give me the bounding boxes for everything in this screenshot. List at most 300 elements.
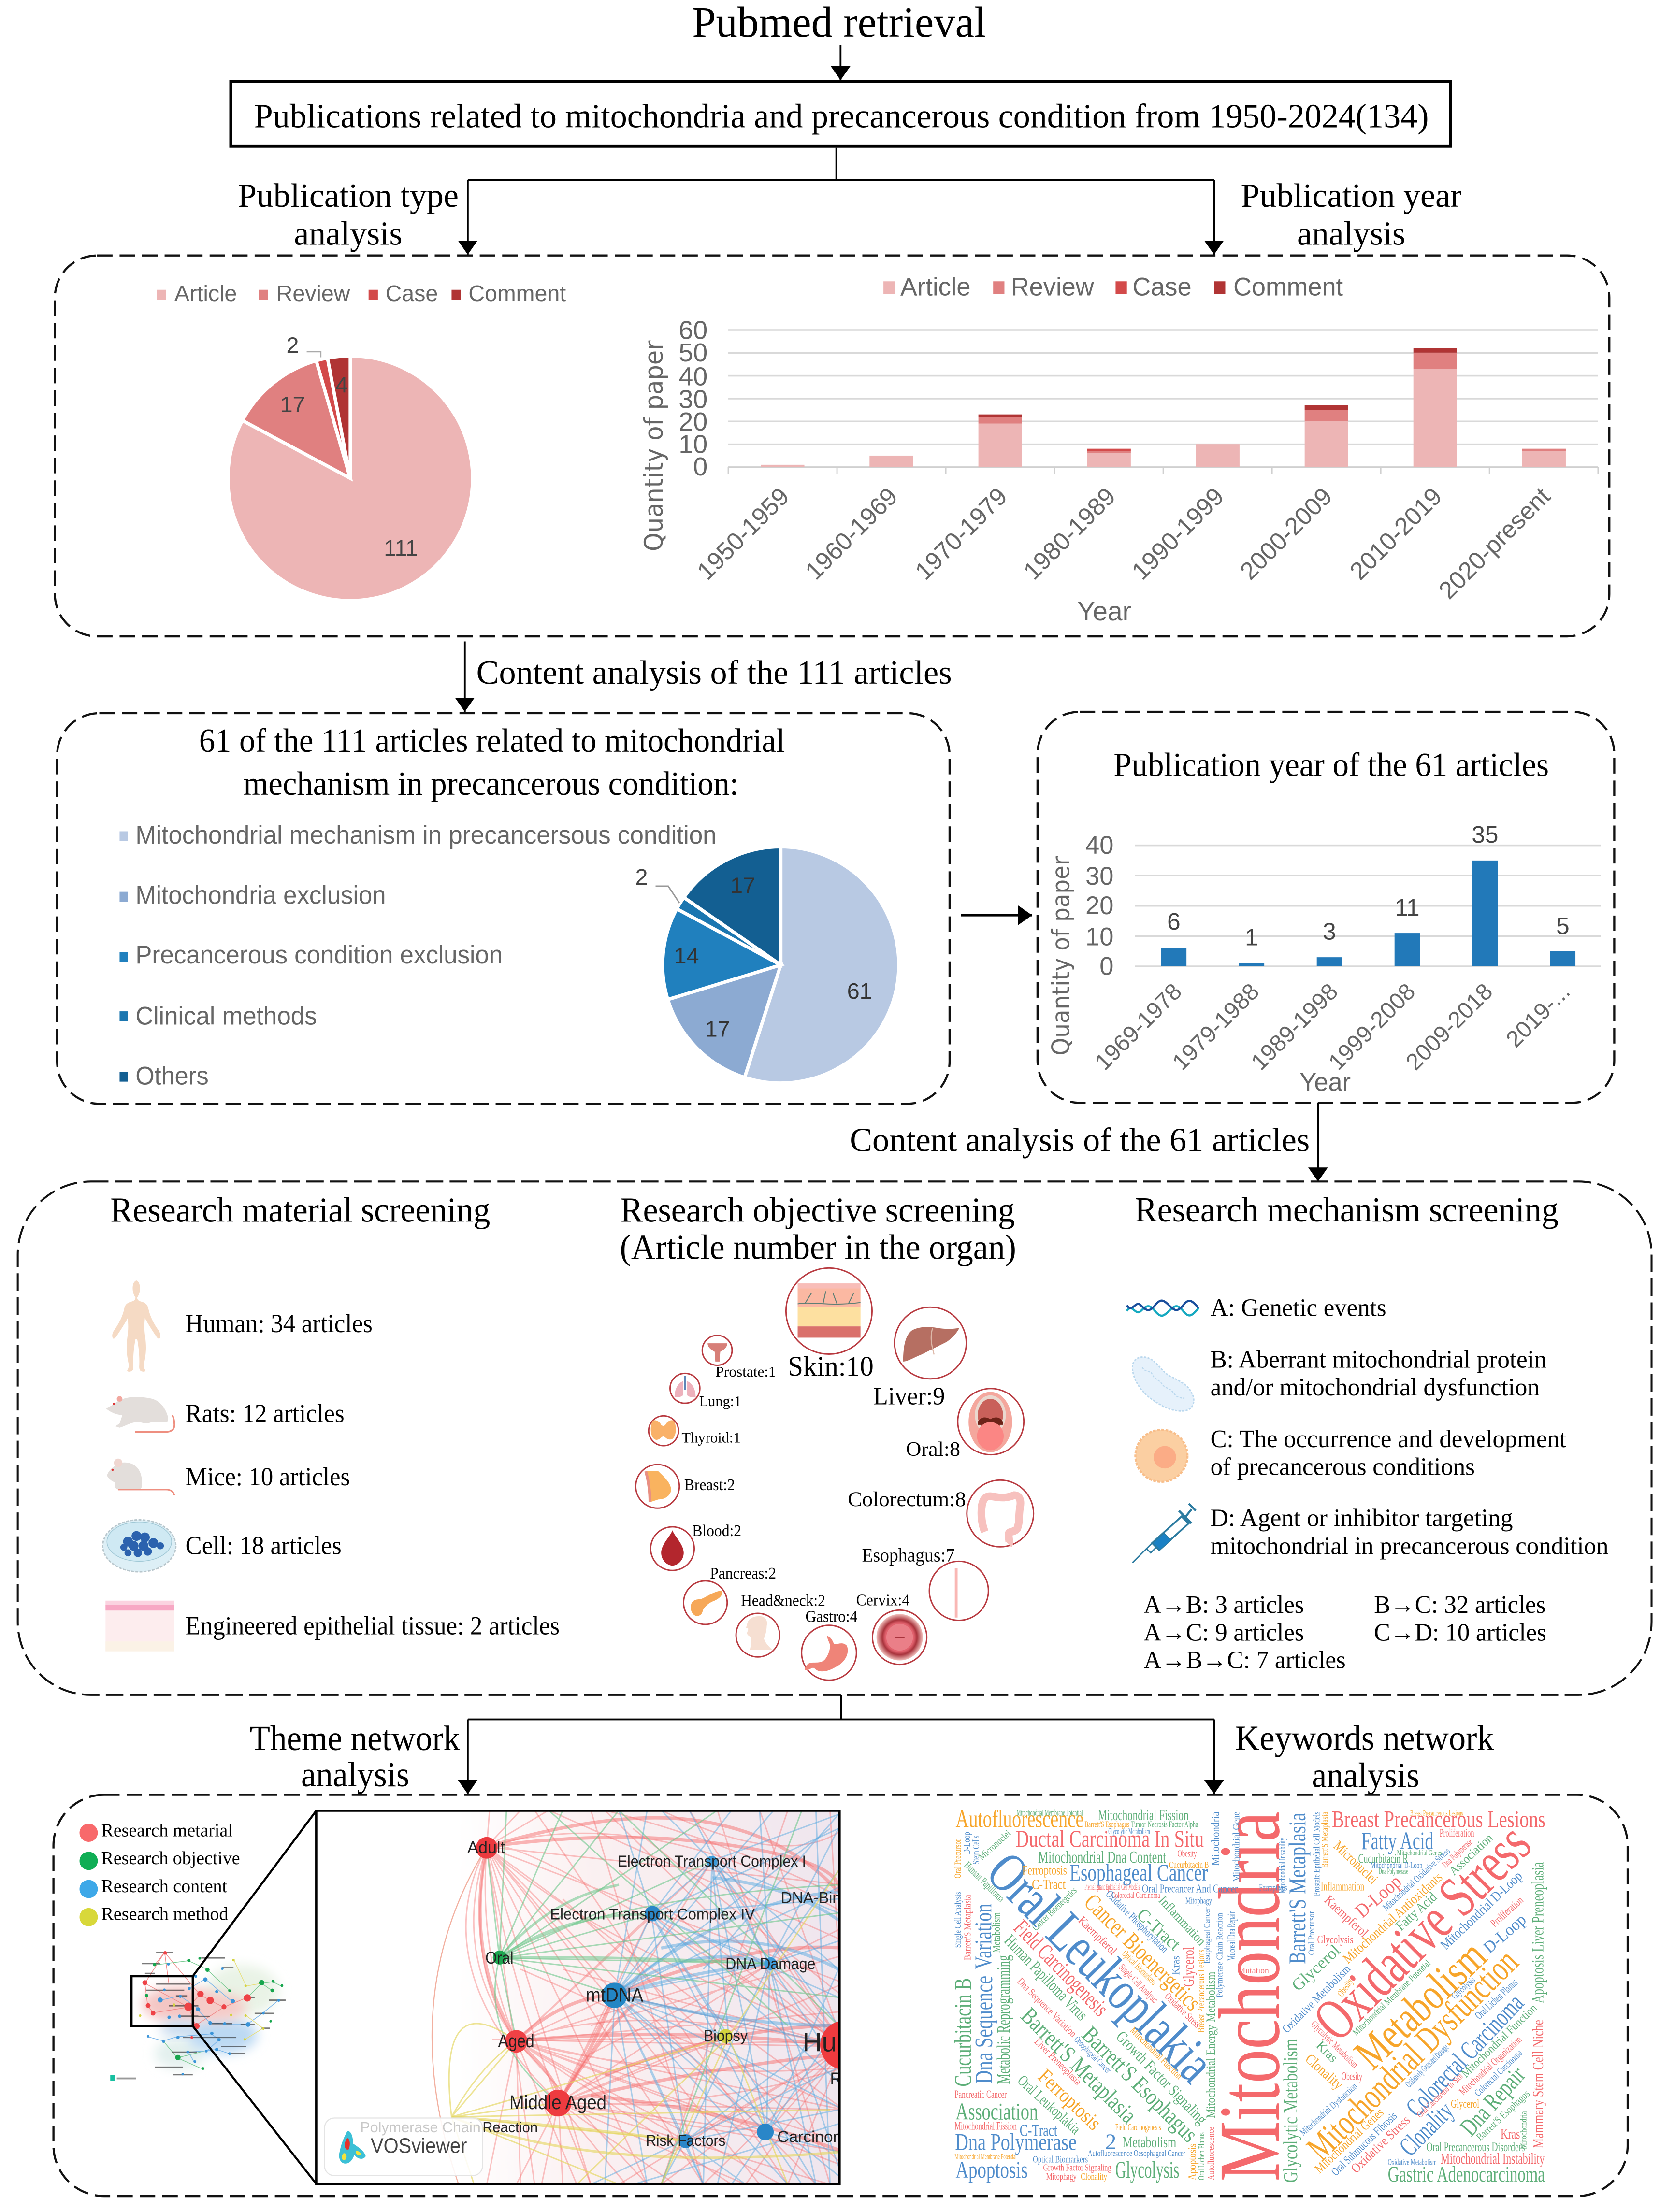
yellow links	[449, 1871, 838, 2184]
pie labels: publication type	[280, 333, 418, 560]
other keywords: Barrett'S Esophagus	[1077, 2021, 1203, 2147]
network labels: Adult	[467, 1838, 505, 1857]
other keywords: Polymerase Chain Reaction	[1215, 1913, 1225, 1997]
green links	[487, 1810, 838, 2184]
bar chart: 61 articles by year: 40	[1085, 832, 1113, 860]
legend: article content: Others	[135, 1062, 209, 1090]
legend: article content: Mitochondria exclusion	[135, 881, 386, 909]
text: agent or inhibitor: mitochondrial in precancerous condition	[1211, 1532, 1608, 1560]
label: lung: Lung:1	[699, 1393, 741, 1409]
other keywords: Fatty Acid	[1361, 1827, 1433, 1855]
other keywords: Mitochondrial Dysfunction	[1298, 2081, 1359, 2138]
other keywords: Mammary Stem Cell Niche	[1529, 2020, 1546, 2149]
legend: network clusters: Research method	[101, 1904, 229, 1925]
other keywords: Micronuclei	[977, 1828, 1013, 1862]
arrow: content analysis of 61 articles	[1317, 1103, 1318, 1181]
other keywords: Mitophagy	[1046, 2171, 1077, 2182]
other keywords: Kaempferol	[1322, 1892, 1371, 1940]
text: agent or inhibitor	[1211, 1504, 1608, 1560]
legend: publication type: Comment	[468, 281, 566, 306]
other keywords: Growth Factor Signaling	[1043, 2162, 1111, 2173]
icon: skin	[786, 1268, 872, 1354]
other keywords: Cucurbitacin B	[950, 1978, 976, 2087]
other keywords: Glycolysis	[1115, 2156, 1179, 2183]
icon: breast	[635, 1465, 679, 1508]
other keywords: Oral Leukoplakia	[1014, 2071, 1084, 2138]
other keywords: Dna Polymerase	[1379, 1866, 1408, 1876]
icon: cervix	[872, 1610, 927, 1665]
heading: keywords network analysis: Keywords network	[1235, 1718, 1494, 1757]
label: skin: Skin:10	[788, 1350, 874, 1382]
panel heading	[199, 722, 785, 803]
other keywords: Proliferation	[1488, 1894, 1526, 1930]
label: pancreas: Pancreas:2	[710, 1565, 776, 1582]
icon: pancreas	[683, 1581, 727, 1624]
panel: publication year of the 61 articles	[1038, 712, 1614, 1103]
heading: research mechanism screening: Research mechanism screening	[1135, 1190, 1559, 1229]
other keywords: Oral Lichen Planus	[1197, 2132, 1206, 2180]
pie chart: publication type	[228, 356, 473, 601]
word: Metabolism: Metabolism	[1345, 1931, 1496, 2079]
other keywords: 2	[1105, 2130, 1116, 2155]
heading: publication type analysis: Publication type	[238, 177, 459, 215]
label: breast: Breast:2	[684, 1476, 735, 1494]
pie labels: article content: 14	[674, 943, 699, 968]
bar chart: 61 articles by year: 3	[1323, 919, 1336, 945]
x axis labels: 2020-present	[1433, 482, 1556, 604]
bar chart: 61 articles by year: 30	[1085, 862, 1113, 891]
other keywords: Field Carcinogenesis	[1009, 1915, 1113, 2021]
x axis labels: 2010-2019	[1344, 482, 1447, 585]
icon: syringe	[1132, 1504, 1196, 1563]
x axis labels	[692, 482, 1556, 604]
other keywords: Premalignant Epithelial Cell Models	[1084, 1882, 1140, 1892]
label: thyroid: Thyroid:1	[681, 1430, 741, 1446]
pie labels: article content: 61	[847, 978, 872, 1004]
other keywords: Optical Biomarkers	[1033, 2154, 1088, 2165]
heading: keywords network analysis: analysis	[1312, 1756, 1419, 1795]
other keywords: Glycerol	[1288, 1941, 1344, 1995]
other keywords: Oral Precursor	[1307, 1911, 1317, 1955]
other keywords: Cancer Bioenergetics	[1030, 1885, 1079, 1933]
other keywords: C-Tract	[1032, 1877, 1066, 1892]
arrow: to publication year of 61 articles	[961, 915, 1032, 916]
text: occurrence and development: C: The occurrence and development	[1211, 1425, 1567, 1453]
network nodes	[476, 1837, 869, 2148]
other keywords: Proliferation	[1440, 1827, 1474, 1839]
icon: liver	[895, 1307, 967, 1379]
icon: lung	[670, 1373, 700, 1403]
other keywords: Mitochondrial Membrane Potential	[1017, 1808, 1083, 1818]
other keywords: Inflammation	[1156, 1893, 1209, 1948]
other keywords: Metabolism	[991, 1912, 1003, 1953]
other keywords: Mitochondrial Oxidative Stress	[1381, 1846, 1452, 1913]
other keywords: Breast Precancerous Lesions	[1332, 1806, 1545, 1832]
other keywords: Obesity	[1342, 2070, 1362, 2083]
other keywords: Oral Precancer And Cancer	[1142, 1882, 1238, 1896]
other keywords: Mitochondrial Antioxidants	[1340, 1869, 1445, 1967]
heading: publication year analysis: Publication year	[1241, 177, 1462, 215]
other keywords: Field Carcinogenesis	[1115, 2122, 1161, 2133]
icon: engineered tissue	[105, 1601, 174, 1652]
legend: article content: Mitochondrial mechanism in precancersous condition	[135, 821, 717, 849]
other keywords: Glycolytic Metabolism	[1309, 2019, 1360, 2070]
text: engineered epithelial tissue articles: Engineered epithelial tissue: 2 articles	[186, 1611, 560, 1640]
heading: theme network analysis: analysis	[301, 1755, 409, 1794]
heading: research objective screening: (Article number in the organ)	[620, 1227, 1016, 1266]
other keywords: Barrett'S Metaplasia	[1016, 2002, 1142, 2128]
other keywords: Mitochondria	[1518, 2111, 1528, 2149]
other keywords: Human Papilloma	[962, 1859, 1007, 1904]
other keywords: Mitochondrial Function	[1459, 2001, 1540, 2080]
heading: content analysis of 61 articles: Content analysis of the 61 articles	[850, 1121, 1310, 1159]
other keywords: Metabolic Reprogramming	[994, 1955, 1014, 2084]
text: cell articles: Cell: 18 articles	[186, 1531, 342, 1560]
other keywords: Human Papilloma Virus	[1001, 1931, 1091, 2024]
chart: keyword word cloud	[950, 1805, 1547, 2187]
label: colorectum: Colorectum:8	[848, 1488, 966, 1511]
other keywords: Apoptosis Liver Preneoplasia	[1528, 1862, 1547, 2003]
other keywords: Mitochondrial Genes	[1312, 2105, 1386, 2176]
heading: research material screening: Research material screening	[110, 1190, 490, 1229]
other keywords: Oral Precursor	[953, 1839, 963, 1878]
label: blood: Blood:2	[692, 1522, 741, 1540]
text: mitochondrial dysfunction: and/or mitochondrial dysfunction	[1211, 1373, 1540, 1401]
legend: network clusters	[79, 1820, 240, 1926]
other keywords: Breast Precancerous Lesions	[1410, 1810, 1463, 1818]
logo: VOSviewer	[325, 2118, 482, 2176]
other keywords: Inflammation	[1321, 1879, 1364, 1893]
legend: article content	[119, 821, 717, 1090]
heading: research objective screening	[620, 1190, 1016, 1266]
other keywords	[950, 1805, 1547, 2187]
legend: publication type: Case	[386, 281, 438, 306]
text: pathway article counts: A→B: 3 articles	[1144, 1591, 1304, 1619]
legend: network clusters: Research content	[101, 1876, 228, 1896]
x axis labels: 2000-2009	[1235, 482, 1337, 585]
pie labels: article content: 2	[635, 864, 648, 890]
other keywords: Glycolytic Metabolism	[1108, 1826, 1150, 1836]
bar chart: 61 articles by year: 2009-2018	[1401, 979, 1498, 1075]
network labels: Reaction	[482, 2119, 538, 2136]
other keywords: C-Tract	[1133, 1904, 1185, 1955]
box: publications: Publications related to mitochondria and precancerous condition from 1950-2024(134)	[254, 98, 1429, 135]
icon: cell dish	[103, 1520, 176, 1572]
panel: network analyses	[54, 1795, 1628, 2196]
y axis labels: 0	[693, 452, 707, 481]
heading: theme network analysis: Theme network	[250, 1719, 460, 1758]
other keywords: D-Loop	[1351, 1870, 1405, 1922]
other keywords: Kras	[1501, 2126, 1520, 2142]
word: Oxidative Stress: Oxidative Stress	[1301, 1811, 1543, 2053]
legend: network clusters: Research objective	[101, 1848, 240, 1868]
x axis labels: 1960-1969	[800, 482, 903, 585]
other keywords: Oxidative Metabolism	[1280, 1962, 1353, 2036]
arrow: retrieval to publications	[840, 45, 841, 80]
other keywords: Oral Lichen Planus	[1472, 1976, 1520, 2022]
legend: article content: Precancerous condition exclusion	[135, 941, 503, 969]
other keywords: Obesity	[1178, 1849, 1197, 1859]
icon: mitochondrion	[1132, 1357, 1194, 1411]
logo: VOSviewer: VOSviewer	[371, 2134, 467, 2158]
icon: gastro	[802, 1625, 856, 1680]
panel heading: Publication year of the 61 articles	[1113, 747, 1549, 784]
icon: thyroid	[649, 1416, 678, 1446]
text: human articles: Human: 34 articles	[186, 1309, 373, 1338]
bar chart: 61 articles by year: 5	[1556, 913, 1570, 939]
panel: 61 of 111 articles	[57, 713, 950, 1104]
other keywords: Ferroptosis	[1259, 1882, 1287, 1892]
label: prostate: Prostate:1	[716, 1364, 776, 1380]
bar chart: publication year: Quantity of paper	[639, 340, 669, 551]
other keywords: Glycerol	[1451, 2097, 1479, 2111]
bar chart: 61 articles by year: 1969-1978	[1090, 979, 1187, 1075]
vertical keywords: Barrett'S Metaplasia	[1284, 1812, 1311, 1964]
chart: full network thumbnail	[110, 1951, 286, 2081]
other keywords: Ductal Carcinoma In Situ	[1016, 1825, 1204, 1852]
text: rats articles: Rats: 12 articles	[186, 1399, 345, 1428]
other keywords: Gastric Adenocarcinoma	[1388, 2162, 1545, 2187]
other keywords: Oxidative Stress	[1348, 2112, 1413, 2176]
heading: theme network analysis	[250, 1719, 460, 1794]
other keywords: Cancer Bioenergetics	[1079, 1888, 1206, 2016]
other keywords: Mitochondrial Gene	[1231, 1811, 1242, 1882]
other keywords: Mitochondrial Genes	[1397, 1849, 1442, 1857]
other keywords: Kras	[1169, 1956, 1182, 1975]
label: esophagus: Esophagus:7	[862, 1545, 955, 1566]
text: agent or inhibitor: D: Agent or inhibitor targeting	[1211, 1504, 1513, 1532]
legend: publication year: Review	[1011, 273, 1094, 301]
icon: DNA	[1127, 1301, 1198, 1316]
other keywords: Mitochondrial D-Loop	[1371, 1860, 1422, 1870]
x axis labels: 1990-1999	[1126, 482, 1229, 585]
network labels: Electron Transport Complex I	[618, 1853, 806, 1870]
arrow: branch to network analyses	[468, 1695, 1214, 1794]
text: mitochondrial dysfunction	[1211, 1345, 1546, 1401]
other keywords: Liver Preneoplasia	[1032, 2036, 1084, 2087]
word: Mitochondrial Dysfunction: Mitochondrial Dysfunction	[1299, 1941, 1526, 2168]
other keywords: Pancreatic Cancer	[954, 2088, 1007, 2101]
network labels: Oral	[485, 1949, 514, 1968]
other keywords: Kras	[1314, 2038, 1341, 2065]
network labels: DNA-Binding	[781, 1889, 870, 1907]
legend: publication year: Case	[1132, 273, 1192, 301]
other keywords: Optical Biomarkers	[1120, 1948, 1159, 1987]
bar chart: 61 articles by year: 1	[1245, 924, 1258, 950]
arrow: branch to publication analyses	[468, 148, 1214, 255]
other keywords: Barrett'S Metaplasia	[1320, 1811, 1330, 1868]
other keywords: Prostate Epithelial Cell Models	[1312, 1811, 1322, 1896]
network labels	[467, 1841, 838, 2146]
other keywords: Colorectal Carcinoma	[1472, 2048, 1525, 2098]
bar chart: 61 articles by year: 1999-2008	[1324, 979, 1420, 1075]
text: occurrence and development	[1211, 1425, 1567, 1480]
text: pathway article counts: B→C: 32 articles	[1374, 1591, 1545, 1619]
heading: content analysis of 111 articles: Content analysis of the 111 articles	[476, 654, 952, 691]
legend: publication year: Comment	[1233, 273, 1343, 301]
other keywords: Glycolytic Metabolism	[1280, 2039, 1301, 2183]
other keywords: Clonality	[1302, 2051, 1347, 2093]
legend: network clusters: Research metarial	[101, 1820, 233, 1840]
diagonal keywords: Colorectal Carcinoma	[1400, 1988, 1529, 2122]
y axis labels: 40	[678, 362, 707, 391]
legend: publication type: Review	[276, 281, 350, 306]
bar chart: 61 articles by year: 10	[1085, 923, 1113, 951]
other keywords: Oral Precancerous Disorders	[1427, 2140, 1525, 2154]
other keywords: Barrett'S Metaplasia	[963, 1895, 973, 1960]
box: publications	[231, 82, 1450, 146]
bar chart: 61 articles by year: 0	[1099, 952, 1113, 980]
y axis labels: 20	[678, 407, 707, 436]
other keywords: Apoptosis	[1186, 2143, 1198, 2180]
pie labels: publication type: 2	[287, 333, 299, 358]
other keywords: Fatty Acid	[1393, 1889, 1440, 1934]
chart: zoomed theme network	[316, 1810, 889, 2184]
network labels: Human	[803, 2027, 889, 2057]
other keywords: Mitochondrial Membrane Potential	[954, 2153, 1017, 2161]
other keywords: Ferroptosis	[1034, 2065, 1106, 2135]
text: pathway article counts: A→C: 9 articles	[1144, 1618, 1304, 1646]
label: liver: Liver:9	[873, 1382, 945, 1410]
other keywords: Autofluorescence	[1206, 2127, 1216, 2180]
other keywords: Cucurbitacin R	[1358, 1852, 1408, 1866]
heading: publication type analysis	[238, 177, 459, 253]
legend: article content: Clinical methods	[135, 1003, 317, 1031]
red links	[466, 1810, 844, 2184]
other keywords: Variation	[970, 1904, 996, 1969]
other keywords: Oxidative Phosphorylation	[1103, 1888, 1171, 1955]
other keywords: D-Loop	[962, 1832, 972, 1854]
blue links	[591, 1810, 844, 2184]
icon: prostate	[702, 1336, 732, 1365]
other keywords: Oral Submucous Fibrosis	[1329, 2110, 1400, 2179]
panel heading: mechanism in precancerous condition:	[244, 765, 738, 803]
icon: blood	[650, 1527, 694, 1570]
other keywords: Association	[955, 2098, 1038, 2125]
other keywords: C-Tract	[1020, 2121, 1057, 2140]
other keywords: Barrett'S Esophagus	[1474, 2088, 1532, 2143]
pie chart: article content	[663, 847, 899, 1083]
bar chart: 61 articles by year: Year	[1299, 1069, 1351, 1097]
other keywords: D-Loop	[1480, 1910, 1530, 1957]
other keywords: Mitophagy	[1185, 1896, 1212, 1906]
other keywords: Oxidative Metabolism	[1388, 2157, 1437, 2167]
logo: VOSviewer: Polymerase Chain	[360, 2119, 481, 2136]
y axis labels: 30	[678, 385, 707, 414]
label: gastro: Gastro:4	[806, 1608, 858, 1625]
pie labels: article content: 17	[730, 873, 755, 898]
bar chart: 61 articles by year	[1047, 821, 1601, 1097]
pie labels: article content	[635, 864, 872, 1041]
other keywords: Mitochondrial Instability	[1277, 1838, 1287, 1893]
other keywords: Dna Polymerase	[1440, 1837, 1474, 1870]
other keywords: Dna Sequence Variation	[1015, 1975, 1079, 2040]
legend: publication year: Article	[900, 273, 971, 301]
text: occurrence and development: of precancerous conditions	[1211, 1452, 1475, 1480]
other keywords: Growth Factor Signaling	[1112, 2028, 1211, 2128]
other keywords: Colorectal Carcinoma	[1111, 1890, 1160, 1900]
other keywords: Oesophageal Cancer	[1072, 2035, 1113, 2076]
text: pathway article counts	[1144, 1591, 1546, 1674]
legend: publication year	[883, 273, 1343, 301]
panel heading: 61 of the 111 articles related to mitochondrial	[199, 722, 785, 760]
panel: research screening	[18, 1181, 1652, 1695]
legend: publication type: Article	[174, 281, 237, 306]
word: Mitochondria: Mitochondria	[1201, 1811, 1298, 2182]
pie labels: publication type: 4	[335, 372, 348, 397]
other keywords: Glycolysis	[1449, 1975, 1477, 2001]
y axis labels: 60	[678, 316, 707, 345]
label: head and neck: Head&neck:2	[741, 1592, 825, 1609]
label: cervix: Cervix:4	[856, 1591, 910, 1609]
legend: publication type	[157, 281, 566, 306]
pie labels: article content: 17	[705, 1016, 730, 1041]
other keywords: Stem Cells	[971, 1836, 982, 1865]
other keywords: Apoptosis	[955, 2156, 1028, 2183]
bar chart: publication year	[639, 316, 1598, 626]
pie labels: publication type: 111	[384, 535, 418, 560]
other keywords: Clonality	[1081, 2171, 1108, 2182]
bar chart: 61 articles by year: 1989-1998	[1246, 979, 1343, 1075]
other keywords: Single Cell Analysis	[953, 1892, 963, 1948]
other keywords: Oxidative Stress	[1162, 1990, 1203, 2030]
icon: human	[112, 1280, 160, 1372]
other keywords: Esophageal Cancer	[1069, 1859, 1208, 1886]
other keywords: Mitochondrial Organization	[1457, 2034, 1524, 2097]
bar chart: 61 articles by year: 20	[1085, 892, 1113, 920]
y axis labels: 50	[678, 338, 707, 367]
other keywords: Mitochondrial Fission	[954, 2120, 1017, 2132]
other keywords: Obesity	[1335, 1976, 1356, 1999]
other keywords: Mitochondrial Dna Content	[1038, 1848, 1166, 1867]
other keywords: Dna Repair	[1455, 2061, 1531, 2141]
bar chart: 61 articles by year: Quantity of paper	[1047, 856, 1075, 1055]
other keywords: Autofluorescence	[955, 1805, 1083, 1833]
bar chart: 61 articles by year: 35	[1472, 821, 1498, 848]
other keywords: Breast Precancerous Lesions	[1196, 1950, 1207, 2032]
y axis labels: 10	[678, 430, 707, 459]
other keywords: Metabolism	[1123, 2133, 1176, 2151]
other keywords: Tumor Necrosis Factor Alpha	[1131, 1819, 1198, 1829]
other keywords: Mucosal Dna Repair	[1226, 1911, 1238, 1961]
icon: esophagus	[929, 1561, 988, 1621]
other keywords: Oxidatively Generated Damage	[1403, 2042, 1451, 2090]
text: pathway article counts: A→B→C: 7 articles	[1144, 1646, 1346, 1674]
callout: zoom frame and guide lines	[131, 1810, 316, 2184]
other keywords: Association	[1446, 1831, 1496, 1878]
x axis labels: 1950-1959	[692, 482, 794, 585]
network labels: Biopsy	[704, 2027, 748, 2044]
other keywords: Ferroptosis	[1022, 1863, 1067, 1878]
icon: precancerous cell	[1135, 1430, 1187, 1482]
other keywords: Mitochondrial Membrane Potential	[1350, 1958, 1433, 2038]
heading: publication type analysis: analysis	[294, 215, 403, 253]
panel: publication type and year	[55, 256, 1609, 636]
network labels: Risk Factors	[646, 2132, 725, 2149]
other keywords: Autofluorescence Oesophageal Cancer	[1088, 2149, 1186, 2159]
icon: mouse	[107, 1459, 174, 1495]
other keywords: Mitochondrial Function	[1128, 2025, 1184, 2082]
x axis labels: 1980-1989	[1018, 482, 1121, 585]
heading: publication year analysis: analysis	[1297, 215, 1405, 253]
bar chart: publication year: Year	[1077, 596, 1131, 626]
heading: publication year analysis	[1241, 177, 1462, 253]
other keywords: Kaempferol	[1076, 1914, 1119, 1957]
other keywords: Micronuclei	[1330, 1838, 1381, 1887]
heading: keywords network analysis	[1235, 1718, 1494, 1795]
icon: colorectum	[967, 1480, 1034, 1547]
network labels: DNA Damage	[725, 1955, 816, 1973]
